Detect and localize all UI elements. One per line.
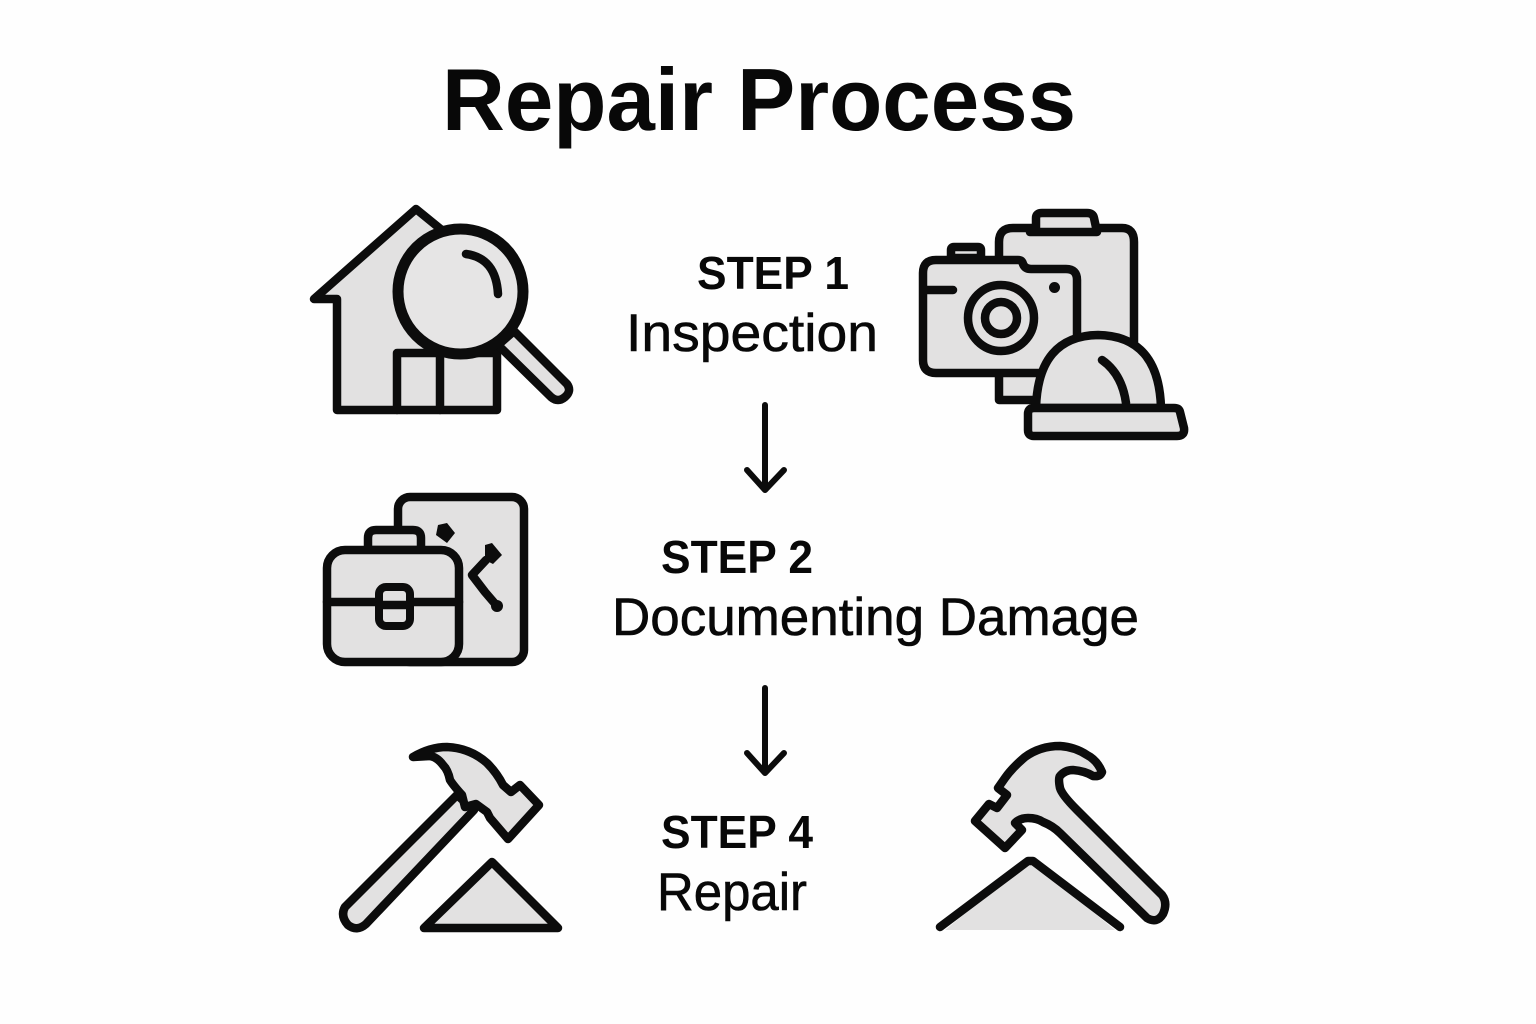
- step 4 label: STEP 4: [661, 806, 813, 858]
- step 2 label: STEP 2: [661, 531, 813, 583]
- step 1 label: STEP 1: [697, 247, 849, 299]
- title: Repair Process: [442, 50, 1076, 149]
- step 1 label: [626, 247, 878, 363]
- icon: toolbox and cracked wall: [327, 497, 524, 662]
- step 2 label: [612, 531, 1139, 647]
- step 1 label: Inspection: [626, 304, 878, 363]
- icon: hammer and roof left: [343, 747, 558, 928]
- step 2 label: Documenting Damage: [612, 588, 1139, 647]
- icon: camera, clipboard and hard hat: [923, 213, 1184, 436]
- arrow: step 2 to step 4: [747, 688, 784, 773]
- arrow: step 1 to step 2: [747, 405, 784, 490]
- step 4 label: [657, 806, 813, 922]
- step 4 label: Repair: [657, 863, 807, 922]
- icon: house with magnifying glass: [314, 209, 569, 410]
- icon: hammer and roof right: [940, 746, 1165, 930]
